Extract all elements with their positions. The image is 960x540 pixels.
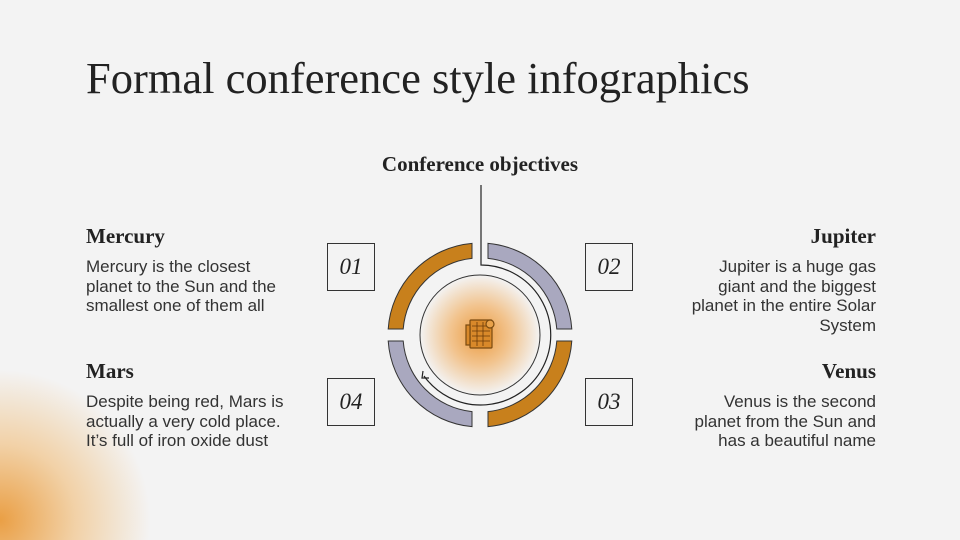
text block: Mars: actually a very cold place. (86, 412, 281, 430)
text block: Venus: Venus (822, 359, 876, 383)
number box 02 (585, 243, 633, 291)
text block: Jupiter: giant and the biggest (718, 276, 876, 296)
text block: Mercury: planet to the Sun and the (86, 276, 276, 296)
text block: Mars: Mars (86, 359, 134, 383)
text block: Jupiter: Jupiter is a huge gas (719, 257, 876, 276)
number box 01 (327, 243, 375, 291)
title: Formal conference style infographics (86, 53, 750, 103)
number box 03: 03 (598, 389, 620, 414)
subtitle: conference objectives: Conference objectives (382, 152, 578, 176)
text block: Mercury: smallest one of them all (86, 296, 265, 315)
number box 04 (327, 378, 375, 426)
text block: Jupiter: System (819, 316, 876, 334)
text block: Mars (86, 359, 283, 450)
number box 03 (585, 378, 633, 426)
center circle (420, 275, 540, 395)
arc segments (388, 243, 572, 427)
text block: Mercury (86, 224, 276, 315)
text block: Venus: has a beautiful name (718, 431, 876, 450)
text block: Venus (695, 359, 876, 450)
decorative glow bottom-left (0, 340, 200, 540)
number box 04: 04 (340, 389, 362, 414)
number box 02: 02 (598, 254, 620, 279)
number box 01: 01 (340, 254, 362, 279)
text block: Jupiter: Jupiter (811, 224, 876, 248)
text block: Jupiter (692, 224, 876, 334)
text block: Venus: planet from the Sun and (695, 412, 876, 430)
text block: Mars: Despite being red, Mars is (86, 392, 283, 411)
spiral arrow (422, 185, 551, 405)
text block: Mercury: Mercury (86, 224, 165, 248)
icon: document (466, 320, 494, 348)
text block: Mercury: Mercury is the closest (86, 257, 250, 276)
text block: Jupiter: planet in the entire Solar (692, 296, 876, 315)
text block: Venus: Venus is the second (724, 392, 876, 411)
text block: Mars: It’s full of iron oxide dust (86, 431, 268, 450)
